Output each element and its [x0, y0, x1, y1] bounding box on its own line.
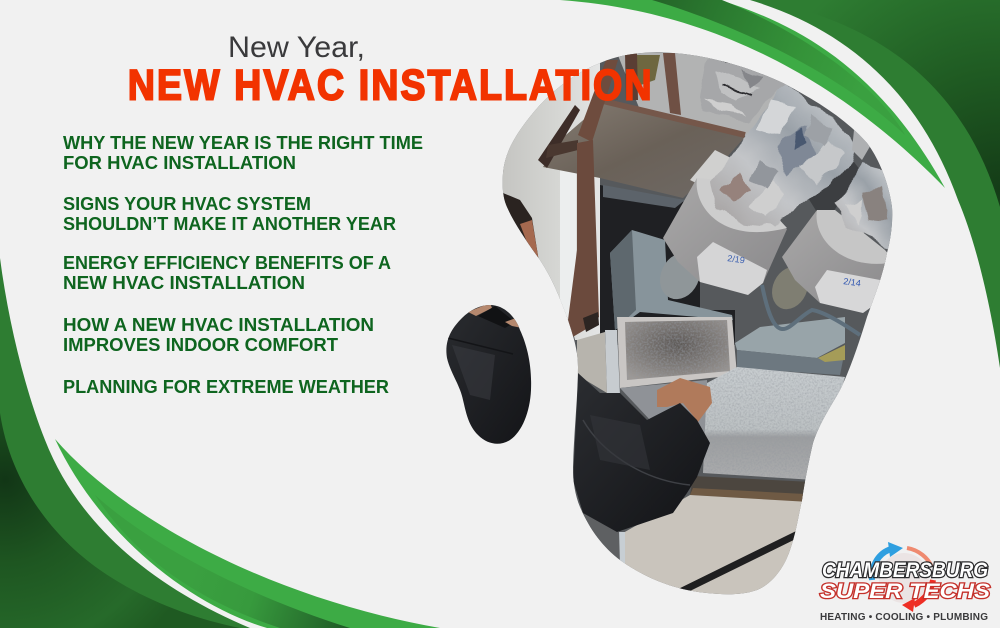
secondary blob: jacket shoulder: [440, 300, 540, 450]
foil duct rear: [700, 58, 790, 123]
duct 2 label box: [815, 270, 880, 313]
topic 2: [63, 193, 396, 234]
top-right green band: [750, 0, 1000, 368]
upper background duct: [617, 53, 790, 137]
duct 2 body: [782, 210, 895, 303]
shoulder base: [440, 300, 540, 450]
rust beam lower: [690, 476, 812, 502]
lower right grey duct: [735, 317, 845, 358]
topic 4: IMPROVES INDOOR COMFORT: [63, 334, 339, 355]
technician hand: [657, 378, 712, 422]
man's head: [503, 193, 539, 262]
topic 4: [63, 314, 374, 355]
floor panel: [620, 495, 810, 600]
dark gap behind duct 2: [809, 162, 858, 211]
yellow insulation scrap: [818, 345, 845, 362]
heading: New HVAC Installation: NEW HVAC INSTALLATION: [128, 62, 651, 109]
rust beam along plate: [603, 101, 745, 135]
skin right: [505, 318, 522, 328]
box under ducts: [610, 230, 733, 330]
bottom-left mid green swoosh: [95, 495, 350, 628]
duct 2: [772, 130, 892, 313]
bottom-left outer green band: [0, 258, 250, 628]
duct 1 label box: [697, 242, 767, 295]
floor dark seam: [680, 533, 800, 592]
duct 2 foil: [834, 162, 892, 250]
bottom-left dark green corner: [0, 413, 240, 628]
topic 3: [63, 252, 391, 293]
rust diagonal brace: [578, 60, 618, 142]
insulated duct: [703, 367, 845, 480]
duct 1 marking: 2/19: [727, 253, 745, 265]
shoulder seam: [448, 338, 513, 354]
filter frame: [617, 317, 737, 388]
air filter: [617, 317, 737, 388]
collar: [478, 306, 515, 328]
duct 1 rim: [697, 178, 787, 232]
grey panel below post: [577, 332, 607, 393]
silver strip: [605, 330, 620, 395]
dark cavity: [600, 185, 735, 345]
metal behind hand: [620, 380, 708, 435]
rust main post: [568, 140, 599, 338]
topic 2: SHOULDN’T MAKE IT ANOTHER YEAR: [63, 213, 396, 234]
duct 2 marking: 2/14: [843, 276, 861, 288]
logo tagline: HEATING • COOLING • PLUMBING: [820, 612, 988, 623]
logo red arc arrow: [902, 580, 933, 612]
top-right mid green swoosh: [652, 0, 905, 135]
rust diagonal left: [538, 105, 580, 168]
metal plate: [543, 103, 745, 198]
white wall strip: [560, 130, 576, 330]
main HVAC photo blob: [500, 50, 900, 600]
logo blue arc arrow: [872, 542, 903, 580]
topic 1: [63, 132, 423, 173]
logo wordmark bottom: SUPER TECHS: [820, 579, 991, 603]
topic 2: SIGNS YOUR HVAC SYSTEM: [63, 193, 311, 214]
bracket behind foil: [690, 150, 730, 182]
wall: [500, 50, 600, 340]
topic list: [63, 132, 423, 397]
top-right light green swoosh: [560, 0, 945, 188]
logo hatch disc: [879, 553, 929, 603]
logo wordmark top: CHAMBERSBURG: [822, 559, 988, 582]
dark panel left bottom: [580, 510, 620, 565]
topic 3: ENERGY EFFICIENCY BENEFITS OF A: [63, 252, 391, 273]
logo orange arc: [907, 548, 932, 567]
duct 2 rim: [817, 210, 895, 264]
topic 3: NEW HVAC INSTALLATION: [63, 272, 305, 293]
bottom-left light green swoosh: [55, 439, 440, 628]
jacket seam: [583, 420, 690, 485]
foil edge upper: [852, 130, 870, 160]
topic 1: FOR HVAC INSTALLATION: [63, 152, 296, 173]
duct 1: [663, 85, 854, 300]
topic 5: PLANNING FOR EXTREME WEATHER: [63, 376, 389, 397]
shoulder skin top: [468, 303, 492, 316]
logo: Chambersburg Super Techs: [820, 542, 991, 623]
topic 4: HOW A NEW HVAC INSTALLATION: [63, 314, 374, 335]
jacket sleeve: [573, 373, 710, 532]
yellowed ceiling gap: [625, 55, 660, 88]
top-right dark green corner: [763, 0, 1000, 207]
filter media: [625, 320, 730, 380]
jacket highlight: [590, 415, 650, 470]
grey panel under plate: [603, 185, 685, 208]
rust cross bar: [546, 140, 578, 158]
duct 1 foil: [710, 83, 857, 227]
light strip at floor: [619, 532, 625, 572]
heading: New Year: New Year,: [228, 31, 365, 64]
duct 1 collar: [666, 256, 698, 300]
duct 1 body: [663, 178, 787, 283]
shoulder fold: [452, 345, 495, 400]
photo base: [500, 50, 900, 600]
flexible conduit: [762, 285, 860, 335]
topic 1: WHY THE NEW YEAR IS THE RIGHT TIME: [63, 132, 423, 153]
rust vertical post: [663, 53, 681, 115]
duct 2 collar: [772, 268, 807, 310]
